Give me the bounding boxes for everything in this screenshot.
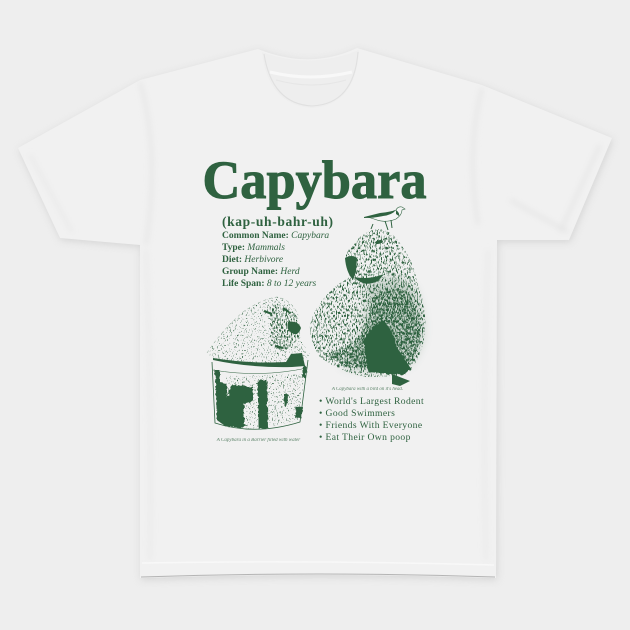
dense fur on lower body [322, 289, 421, 368]
bullet list [319, 396, 424, 443]
eye [375, 239, 383, 245]
illustration: capybara in barrel [207, 297, 310, 430]
fact: group name: Group Name: Herd [222, 267, 300, 277]
bullet: poop: • Eat Their Own poop [319, 432, 411, 443]
bullet: friends: • Friends With Everyone [319, 420, 422, 431]
eye, ear and chin [264, 308, 289, 348]
barrel outline [212, 360, 308, 429]
water line shadow [213, 353, 305, 367]
illustration: capybara with bird [310, 229, 425, 386]
bullet: largest rodent: • World's Largest Rodent [319, 396, 424, 407]
barrel speckle [226, 374, 305, 430]
fact: life span: Life Span: 8 to 12 years [222, 279, 317, 289]
foot [392, 374, 410, 386]
barrel rim [213, 368, 307, 374]
barrel stains [215, 364, 307, 428]
capybara outline [207, 297, 298, 353]
collar [262, 50, 359, 108]
sleeve seams and folds [30, 82, 600, 560]
capybara head and shoulders [207, 297, 310, 363]
neck shadow [354, 274, 384, 284]
fact: type: Type: Mammals [222, 243, 285, 253]
caption: capybara with bird: A Capybara with a bird on it's head. [331, 387, 403, 392]
hem [142, 562, 494, 565]
icon: bird on capybara head [364, 207, 405, 230]
title: Capybara [202, 150, 426, 210]
bullet: swimmers: • Good Swimmers [319, 408, 395, 419]
chest shadow [364, 320, 411, 375]
t-shirt [18, 48, 613, 580]
snout [345, 256, 357, 280]
body mid tone [340, 277, 423, 372]
caption: capybara in barrel: A Capybara in a Barrier filled with water [216, 438, 300, 443]
fact: common name: Common Name: Capybara [222, 231, 329, 241]
fact: diet: Diet: Herbivore [222, 255, 283, 265]
face fur [270, 304, 300, 352]
pronunciation: (kap-uh-bahr-uh) [222, 214, 333, 229]
facts list [222, 231, 329, 289]
body hatching [310, 229, 425, 377]
nose [288, 322, 301, 334]
